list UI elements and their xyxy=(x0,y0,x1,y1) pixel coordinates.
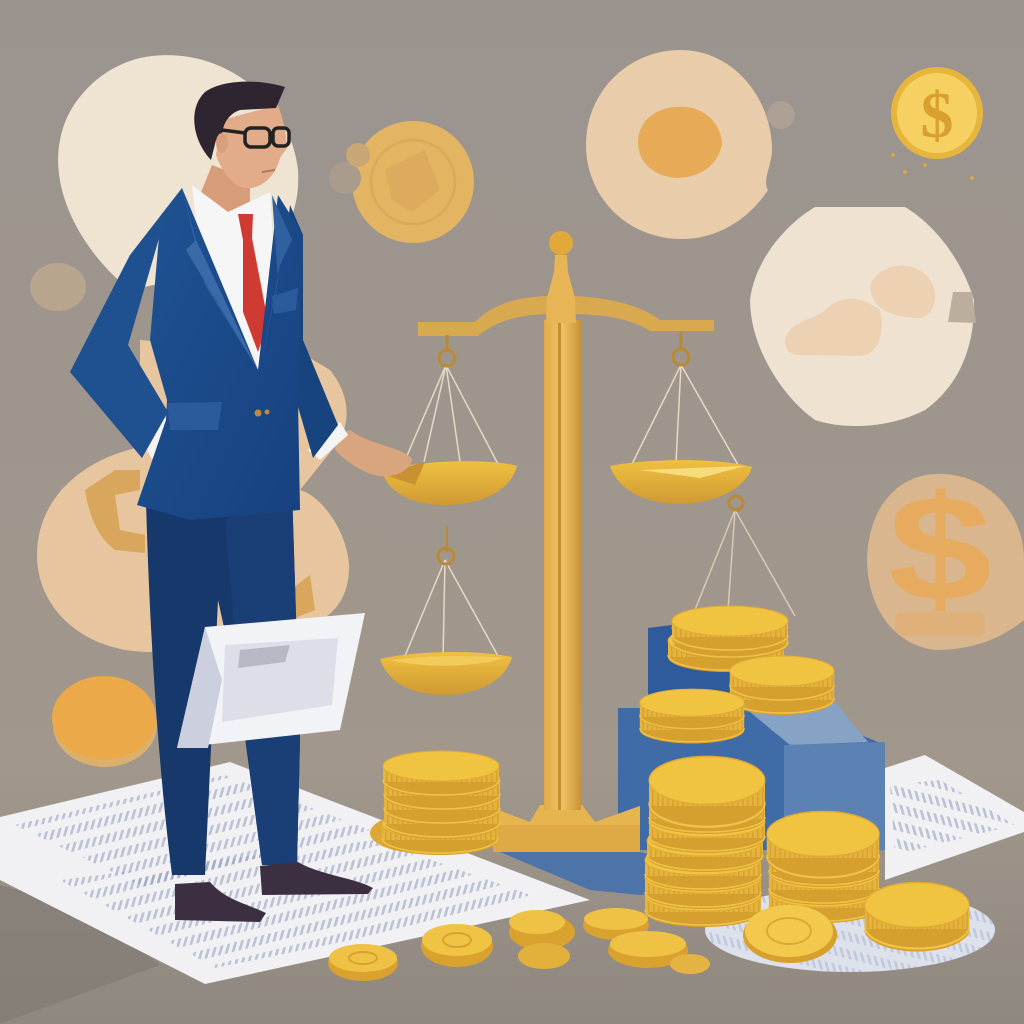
trousers xyxy=(146,490,300,875)
jacket: near arm xyxy=(70,188,182,458)
white cuffs xyxy=(308,422,348,460)
base xyxy=(493,805,640,852)
decorative coin: top centre xyxy=(329,121,474,243)
decorative circle: right dollar xyxy=(867,464,1024,650)
pocket and buttons xyxy=(167,402,222,430)
stack: upper right xyxy=(730,656,834,715)
right lower strings xyxy=(695,510,795,616)
stack: far right xyxy=(865,882,969,952)
left lower pan strings xyxy=(402,560,498,663)
jacket: far arm xyxy=(280,205,338,458)
tie xyxy=(238,214,268,352)
blue floor shape xyxy=(500,852,760,895)
shoes xyxy=(175,882,266,922)
jacket: left lapel xyxy=(182,188,258,370)
document held xyxy=(177,613,365,748)
plate under coins xyxy=(705,888,995,972)
pole xyxy=(544,320,581,810)
document spread on floor xyxy=(0,755,1024,984)
floor shadow xyxy=(0,885,160,1024)
decorative circle: left middle xyxy=(37,340,349,652)
left upper pan xyxy=(382,461,517,505)
icon: gold dollar coin top right: $ xyxy=(920,79,954,152)
finial xyxy=(549,231,573,255)
coin stacks xyxy=(328,606,969,981)
jacket: right lapel xyxy=(260,195,292,370)
jacket: torso xyxy=(137,188,303,520)
decorative circle: right dollar: $ xyxy=(888,464,992,632)
decorative circle: top left cream xyxy=(58,55,298,290)
head xyxy=(216,105,287,188)
balance scale xyxy=(380,231,795,852)
hand xyxy=(335,430,412,476)
businessman figure xyxy=(70,82,412,922)
right upper pan xyxy=(610,460,752,504)
icon: gold dollar coin top right xyxy=(891,67,983,180)
left upper pan strings xyxy=(403,365,498,465)
neck xyxy=(200,165,250,232)
stack: large centre xyxy=(645,756,765,927)
shirt xyxy=(192,185,278,370)
blue boxes behind coins xyxy=(618,625,885,860)
small blob left xyxy=(30,263,86,311)
decorative circle: top centre right xyxy=(586,50,772,239)
stack: right xyxy=(767,812,879,923)
left lower pan xyxy=(380,652,512,695)
ear xyxy=(216,133,228,153)
glasses xyxy=(222,128,289,147)
beam xyxy=(418,296,714,336)
small blob top right xyxy=(767,101,795,129)
stack: upper left xyxy=(640,689,744,744)
loose coins xyxy=(328,905,837,981)
stack: left of scale xyxy=(370,751,500,855)
right upper pan strings xyxy=(632,365,738,465)
decorative coin: lower left xyxy=(52,676,157,767)
stack: upper blue box xyxy=(668,606,788,672)
mouth xyxy=(262,170,275,172)
hair xyxy=(194,82,285,160)
decorative circle: right cream polygon xyxy=(750,207,976,426)
